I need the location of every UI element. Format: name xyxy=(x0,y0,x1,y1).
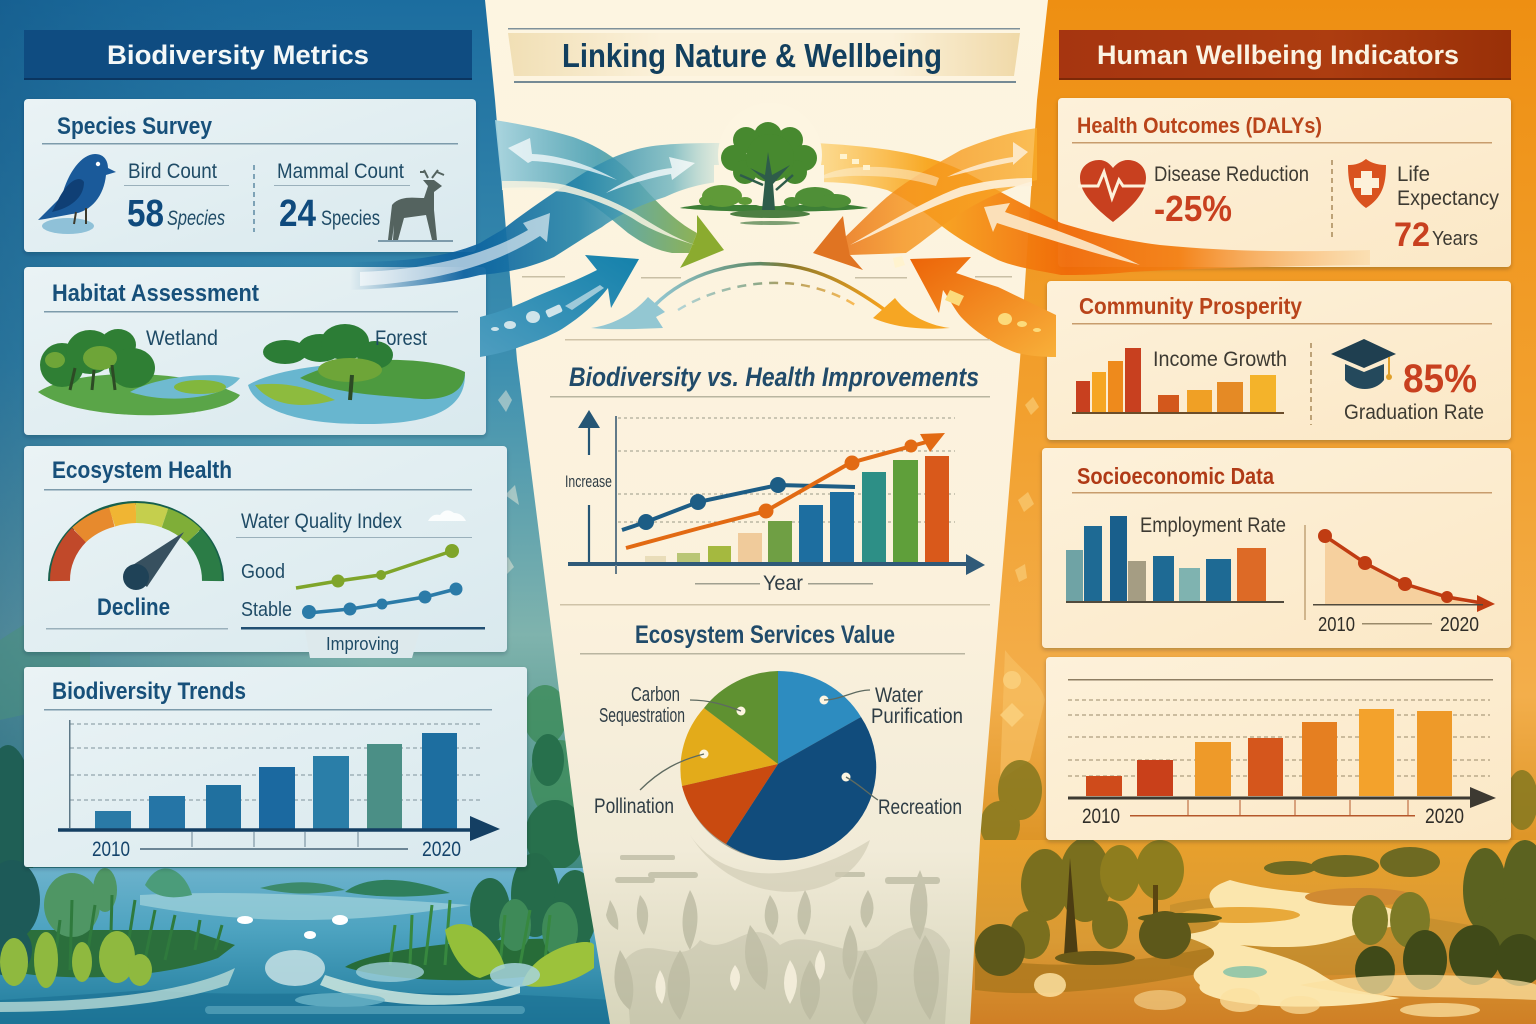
label: water purification: Purification xyxy=(871,705,963,728)
arrowhead: green xyxy=(680,215,724,268)
gauge: decline xyxy=(46,503,228,630)
label: recreation: Recreation xyxy=(878,796,962,819)
panel: Community Prosperity: Community Prosperity xyxy=(1079,293,1302,319)
landscape: wetland river xyxy=(0,853,620,1024)
stat: Mammal Count: Species xyxy=(321,207,380,230)
chart: Water Quality Index xyxy=(236,510,485,630)
arrow: white right xyxy=(606,157,695,193)
panel: Habitat Assessment: Wetland xyxy=(146,327,218,350)
icon: deer xyxy=(378,170,453,242)
stat: Disease Reduction: Disease Reduction xyxy=(1154,163,1309,186)
flow arrows: biodiversity to tree xyxy=(350,120,1012,357)
slice: orange-red xyxy=(682,764,778,844)
stat: Bird Count xyxy=(124,160,229,235)
tab: Improving: Improving xyxy=(326,634,399,654)
header: Biodiversity Metrics: Biodiversity Metrics xyxy=(107,40,369,70)
heading: Biodiversity vs. Health Improvements: Biodiversity vs. Health Improvements xyxy=(569,362,979,392)
panel: Socioeconomic Data xyxy=(1042,448,1511,648)
icon: central tree xyxy=(680,103,868,225)
tab: Improving xyxy=(305,630,420,658)
flow arrows: wellbeing to tree xyxy=(813,128,1370,357)
arrow: white up-left xyxy=(508,138,617,180)
bar chart: trends 2010 to 2020: 2010 xyxy=(92,838,130,861)
stat: Bird Count: Species xyxy=(167,207,225,230)
panel: Habitat Assessment xyxy=(24,267,486,435)
stat: Mammal Count: 24 xyxy=(279,193,316,235)
panel: Habitat Assessment: Habitat Assessment xyxy=(52,280,259,307)
bar chart: 2010 to 2020: 2010 xyxy=(1082,805,1120,828)
panel: Habitat Assessment: Forest xyxy=(375,327,427,350)
panel: Ecosystem Health: Ecosystem Health xyxy=(52,457,232,484)
bar chart: income growth xyxy=(1072,348,1287,414)
header: Human Wellbeing Indicators xyxy=(1059,30,1511,80)
panel: Health Outcomes xyxy=(1058,98,1511,267)
arrow: orange lower xyxy=(910,257,1056,357)
line chart: declining trend: 2020 xyxy=(1440,614,1479,636)
ribbon: orange long over health panel xyxy=(815,143,1370,275)
header: Linking Nature & Wellbeing xyxy=(508,28,1020,83)
panel: Biodiversity Trends xyxy=(24,667,527,867)
panel: Health Outcomes: Health Outcomes (DALYs) xyxy=(1077,113,1322,138)
stat: Life Expectancy: Expectancy xyxy=(1397,187,1499,210)
panel: Biodiversity Trends: Biodiversity Trends xyxy=(52,678,246,705)
stat: Bird Count: 58 xyxy=(127,193,164,235)
stat: Graduation Rate: Graduation Rate xyxy=(1344,401,1484,424)
icon: graduation cap xyxy=(1331,339,1396,389)
chart: Water Quality Index: Stable xyxy=(241,599,292,621)
slice: pollination xyxy=(680,708,778,786)
illustration: wetland xyxy=(38,329,240,415)
slice: recreation xyxy=(726,717,876,860)
heading: Ecosystem Services Value: Ecosystem Services Value xyxy=(635,621,895,649)
line chart: declining trend xyxy=(1313,529,1495,636)
stat: Disease Reduction: -25% xyxy=(1154,188,1232,229)
stat: Graduation Rate: 85% xyxy=(1403,357,1477,401)
panel: wellbeing bar chart xyxy=(1046,657,1511,840)
stat: Life Expectancy: 72 xyxy=(1394,216,1430,254)
stat: Life Expectancy: Years xyxy=(1432,228,1478,250)
ribbon: blue to green arrow xyxy=(495,120,697,253)
bar chart: 2010 to 2020: 2020 xyxy=(1425,805,1464,828)
icon: bluebird xyxy=(38,154,116,234)
panel: Socioeconomic Data: Socioeconomic Data xyxy=(1077,463,1274,489)
pebble pattern xyxy=(606,855,950,1024)
ribbon bowl below pie xyxy=(690,835,870,892)
icon: heart with pulse xyxy=(1078,160,1148,222)
arrow: pale left on panel xyxy=(984,203,1140,265)
header: Linking Nature & Wellbeing: Linking Nature & Wellbeing xyxy=(562,37,942,74)
slice: water purification xyxy=(778,671,861,764)
arrow: blue lower xyxy=(480,255,639,357)
panel: Community Prosperity xyxy=(1047,281,1511,440)
label: water purification xyxy=(871,684,963,728)
chart: Water Quality Index: Good xyxy=(241,561,285,583)
label: carbon sequestration: Sequestration xyxy=(599,705,685,727)
icon: medical shield xyxy=(1348,159,1386,208)
label: carbon sequestration: Carbon xyxy=(631,684,680,706)
stat: Mammal Count: Mammal Count xyxy=(277,160,404,183)
ribbon: blue to tree xyxy=(350,143,726,290)
arrow: white up-right xyxy=(360,213,550,286)
bar chart: 2010 to 2020 xyxy=(1068,709,1496,828)
line chart: declining trend: 2010 xyxy=(1318,614,1355,636)
panel: Species Survey xyxy=(24,99,476,252)
label: pollination: Pollination xyxy=(594,795,674,818)
header: Biodiversity Metrics xyxy=(24,30,472,80)
stat: Disease Reduction xyxy=(1154,163,1309,229)
background: right wellbeing side xyxy=(960,0,1536,1024)
bar chart: employment rate: Employment Rate xyxy=(1140,514,1286,537)
panel: Species Survey: Species Survey xyxy=(57,113,213,140)
bar chart: income growth: Income Growth xyxy=(1153,348,1287,371)
slice: carbon sequestration xyxy=(704,671,778,764)
label: water purification: Water xyxy=(875,684,923,707)
arrow: arc link between sides xyxy=(565,264,990,340)
arrow: increase axis xyxy=(588,425,590,562)
left bank xyxy=(0,930,235,977)
header: Human Wellbeing Indicators: Human Wellbeing Indicators xyxy=(1097,40,1459,70)
illustration: forest xyxy=(248,324,465,424)
panel: Ecosystem Health xyxy=(24,446,507,658)
label: carbon sequestration xyxy=(599,684,685,727)
stat: Bird Count: Bird Count xyxy=(128,160,217,183)
landscape: golden river xyxy=(965,838,1536,1024)
stat: Life Expectancy: Life xyxy=(1397,163,1430,186)
bar chart: employment rate xyxy=(1066,514,1286,603)
chart: biodiversity vs health: Increase xyxy=(565,472,612,491)
chart: biodiversity vs health: Year xyxy=(763,572,803,595)
background: left biodiversity side xyxy=(0,0,620,1024)
background: centre cream column xyxy=(485,0,1048,1024)
chart: biodiversity vs health xyxy=(560,410,990,606)
right bank xyxy=(345,939,590,980)
stat: Mammal Count xyxy=(274,160,410,235)
gauge: decline: Decline xyxy=(97,594,170,621)
bar chart: trends 2010 to 2020: 2020 xyxy=(422,838,461,861)
bar chart: trends 2010 to 2020 xyxy=(58,720,500,861)
pie chart: ecosystem services xyxy=(594,671,963,860)
chart: Water Quality Index: Water Quality Index xyxy=(241,510,402,533)
arrow: pale right xyxy=(947,142,1028,177)
arrowhead: orange left xyxy=(813,216,863,270)
stat: Life Expectancy xyxy=(1394,163,1499,254)
stat: Graduation Rate xyxy=(1344,357,1484,424)
ribbon: orange rising to right xyxy=(845,128,1037,255)
